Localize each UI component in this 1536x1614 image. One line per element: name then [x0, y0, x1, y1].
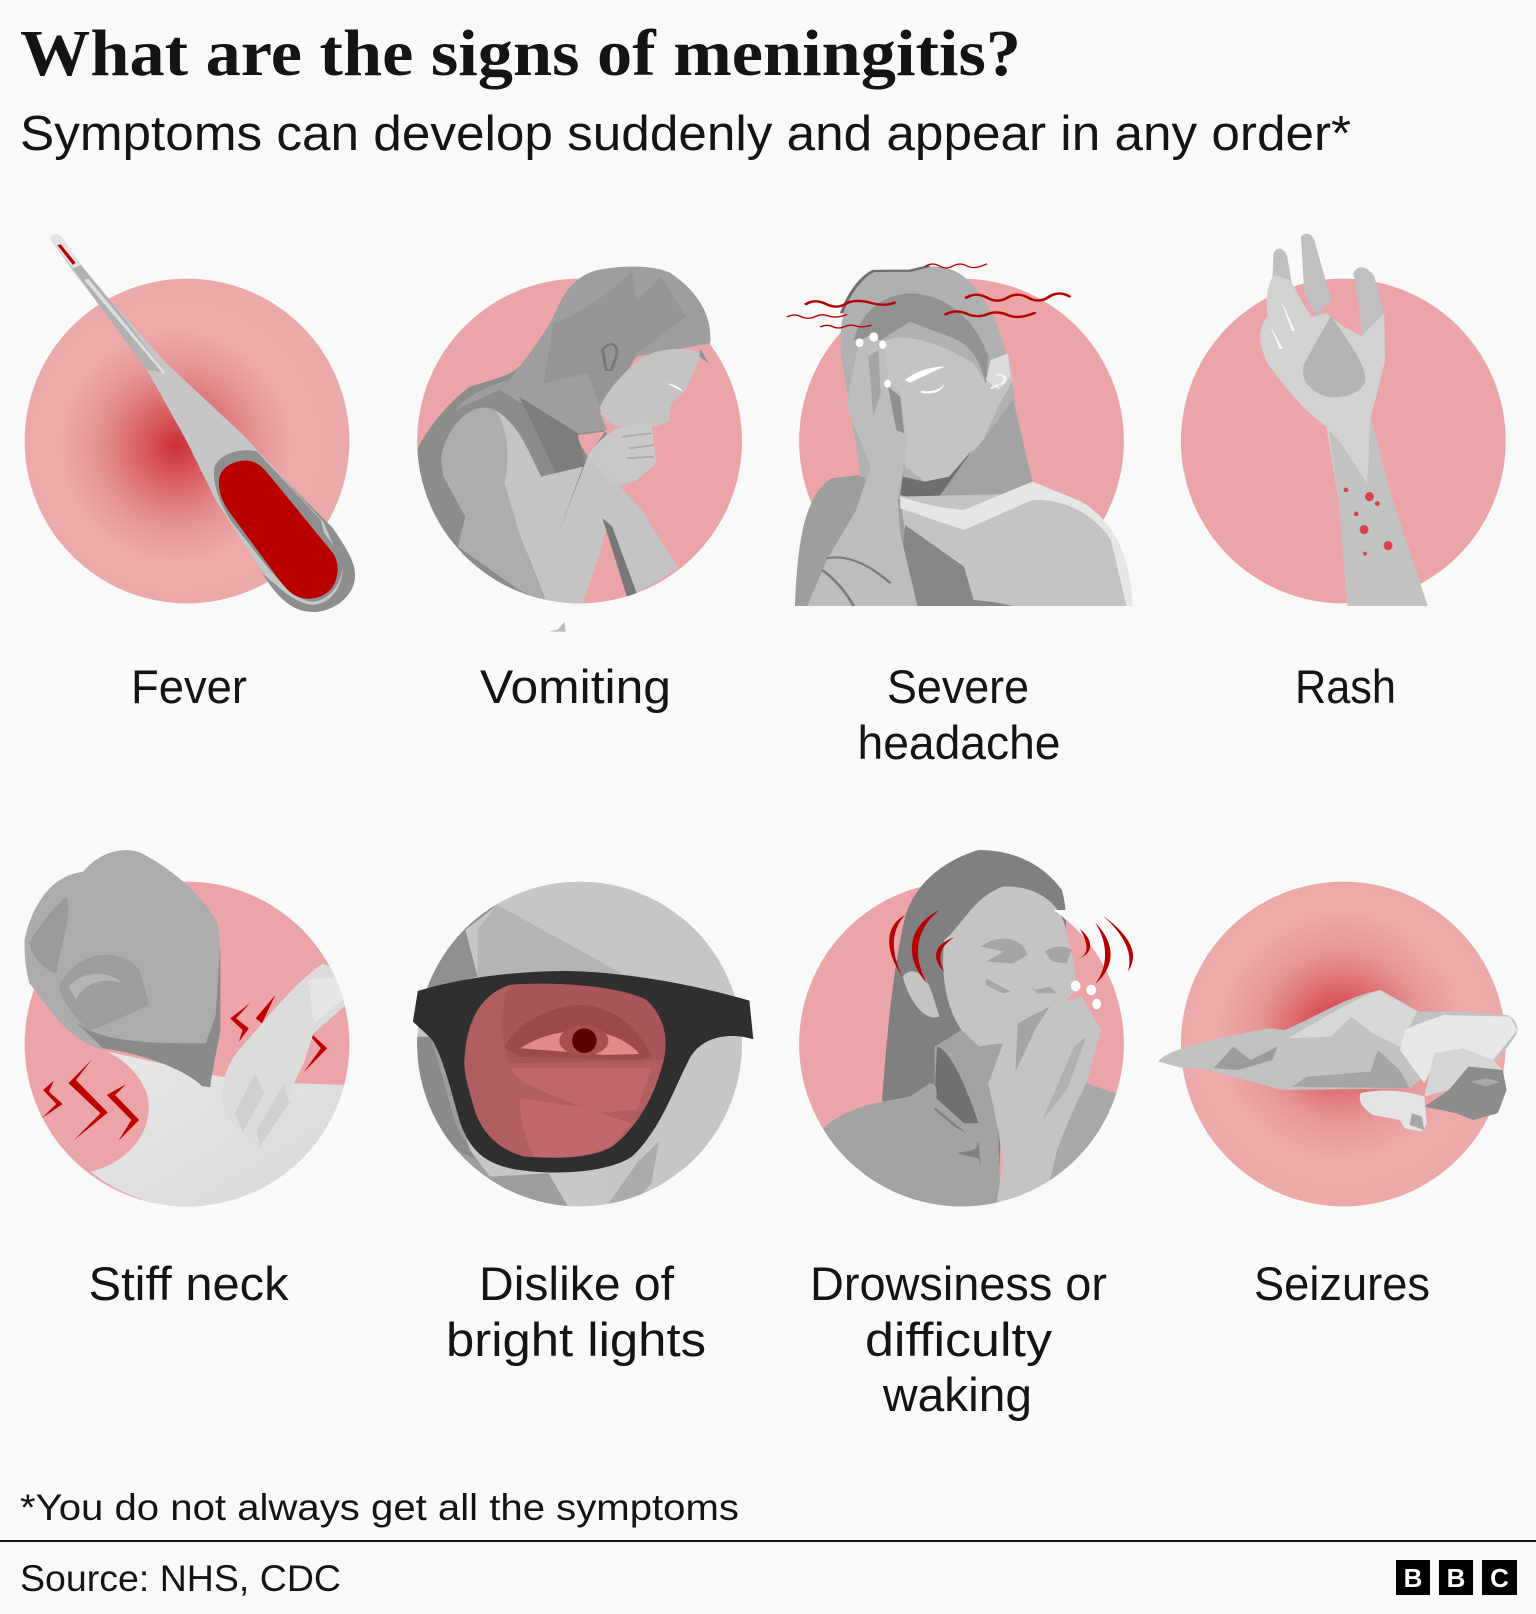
label: Drowsiness or difficulty waking: Drowsiness or — [810, 1257, 1107, 1310]
label: Severe headache: Severe — [887, 660, 1029, 713]
panel: rash — [1181, 234, 1506, 606]
panel: severe headache — [788, 264, 1133, 606]
circle: stiff neck background — [25, 882, 349, 1206]
icon: thermometer — [50, 234, 355, 612]
icon: sunglasses with eye — [413, 971, 753, 1172]
decorative mark below vomiting — [550, 622, 566, 632]
icon: person with headache — [795, 266, 1133, 606]
icon: red pain zigzags — [42, 995, 327, 1141]
BBC logo — [1396, 1560, 1517, 1595]
circle: headache background — [799, 279, 1124, 603]
label: Seizures: Seizures — [1254, 1257, 1430, 1310]
label: Drowsiness or difficulty waking: waking — [882, 1368, 1032, 1421]
circle: vomiting background — [417, 279, 742, 603]
icon: face shading — [416, 905, 659, 1207]
label: Dislike of bright lights: Dislike of — [479, 1257, 675, 1310]
circle: seizures background — [1181, 882, 1506, 1206]
BBC logo: B — [1447, 1563, 1465, 1593]
BBC logo: B — [1404, 1563, 1422, 1593]
panel: dislike of bright lights — [413, 882, 753, 1207]
label: Vomiting: Vomiting — [480, 660, 671, 713]
label: Severe headache: headache — [858, 716, 1060, 769]
circle: drowsiness background — [799, 882, 1124, 1206]
icon: head and neck with hand — [24, 850, 348, 1210]
icon: red dizziness arcs and fingertips — [889, 910, 1133, 1009]
panel: fever — [25, 234, 355, 612]
BBC logo: C — [1490, 1563, 1509, 1593]
label: Stiff neck: Stiff neck — [88, 1257, 289, 1310]
label: Rash: Rash — [1295, 660, 1396, 713]
footnote: *You do not always get all the symptoms — [20, 1487, 739, 1528]
subtitle: Symptoms can develop suddenly and appear in any order* — [20, 107, 1351, 161]
circle: rash background — [1181, 279, 1506, 603]
icon: red pain waves — [788, 264, 1069, 328]
circle: grey face background — [417, 882, 742, 1206]
panel: seizures — [1158, 882, 1517, 1206]
label: Drowsiness or difficulty waking: difficulty — [865, 1313, 1053, 1366]
panel: stiff neck — [24, 850, 349, 1210]
circle: fever background — [25, 279, 349, 603]
label: Fever: Fever — [131, 660, 247, 713]
title: What are the signs of meningitis? — [20, 17, 1021, 90]
label: Dislike of bright lights: bright lights — [446, 1313, 706, 1366]
icon: person vomiting — [411, 267, 710, 603]
icon: drowsy person yawning — [822, 850, 1121, 1207]
panel: drowsiness — [799, 850, 1133, 1207]
icon: raised arm with rash — [1260, 234, 1428, 606]
panel: vomiting — [411, 267, 742, 632]
source: Source: NHS, CDC — [20, 1558, 341, 1599]
icon: person having a seizure — [1158, 990, 1517, 1132]
